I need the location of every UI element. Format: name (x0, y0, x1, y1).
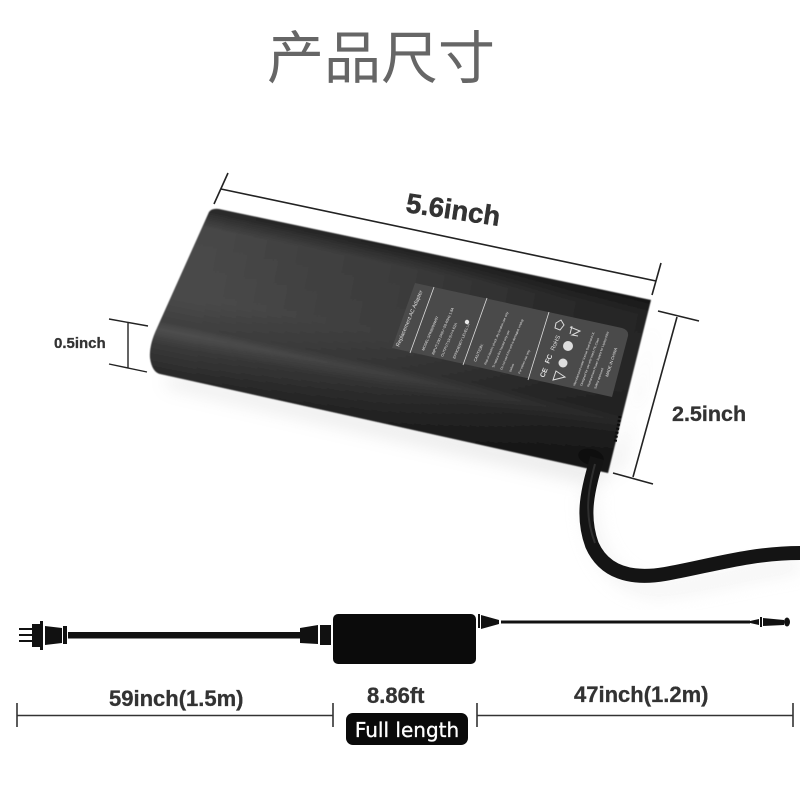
dimension: 5.6inch (214, 173, 661, 295)
label legal text: MADE IN CHINA (604, 347, 618, 377)
dimension: 47inch: 47inch(1.2m) (574, 682, 708, 707)
label specs: MODEL:SPA90/90W07 (421, 316, 439, 351)
AC cord (68, 632, 300, 638)
plug icon (19, 621, 67, 650)
title: 产品尺寸 (267, 27, 495, 91)
cable shadow (589, 490, 800, 590)
dimension: 0.5inch (54, 319, 148, 372)
adapter body (150, 209, 651, 473)
label caution text (472, 311, 531, 374)
label legal text: Replacement Power Supply for Laptop 90W (586, 331, 610, 387)
dimension: 59inch (17, 686, 333, 727)
label caution text: Do not use if the unit is damaged, unplug (499, 318, 524, 370)
label dividers (410, 287, 549, 380)
label caution text: CAUTION: (472, 343, 484, 362)
label legal text: Designed for use with listed ITE Class (579, 337, 600, 386)
dimension: 2.5inch: 2.5inch (672, 402, 746, 426)
dimension: 47inch (477, 682, 793, 727)
label specs: INPUT:100-240V~50-60Hz 1.8A (431, 306, 455, 355)
adapter shadow (165, 320, 655, 485)
label legal text (572, 331, 618, 389)
DC strain relief (478, 614, 499, 629)
label certification marks: RoHS (550, 335, 562, 352)
adapter silhouette (333, 614, 476, 664)
label specs (421, 306, 471, 359)
label caution text: For indoor use only (517, 349, 531, 374)
full length badge (346, 713, 468, 745)
label caution text: Risk of electric shock, dry location use only (483, 311, 509, 365)
dimension: 2.5inch (613, 311, 746, 484)
label specs: OUTPUT:19.5V=4.62A (440, 322, 458, 357)
label certification marks: FC (544, 353, 554, 365)
cable (576, 446, 800, 576)
label heading: Replacement AC Adapter (395, 290, 425, 348)
AC connector (300, 625, 331, 645)
dimension: 5.6inch: 5.6inch (404, 187, 502, 232)
dimension: 0.5inch: 0.5inch (54, 335, 106, 352)
label specs: EFFICIENCY LEVEL:VI (452, 323, 471, 359)
vent slots (615, 416, 620, 443)
label legal text: Manufactured under license Dual brand UL (572, 331, 596, 386)
total length value: 8.86ft (367, 683, 425, 708)
cord diagram (19, 614, 790, 664)
product photo: adapter (150, 209, 800, 590)
label certification marks: CE (539, 367, 550, 379)
label certification marks (539, 320, 580, 380)
label caution text: To reduce fire hazard only use (491, 330, 511, 368)
DC connector (750, 617, 784, 627)
full length badge: Full length (355, 718, 459, 742)
dimension: 59inch: 59inch(1.5m) (109, 686, 244, 711)
DC cord (501, 620, 750, 624)
label legal text: Safety approved (593, 367, 605, 389)
spec label (392, 283, 628, 397)
label caution text: before (508, 363, 515, 372)
